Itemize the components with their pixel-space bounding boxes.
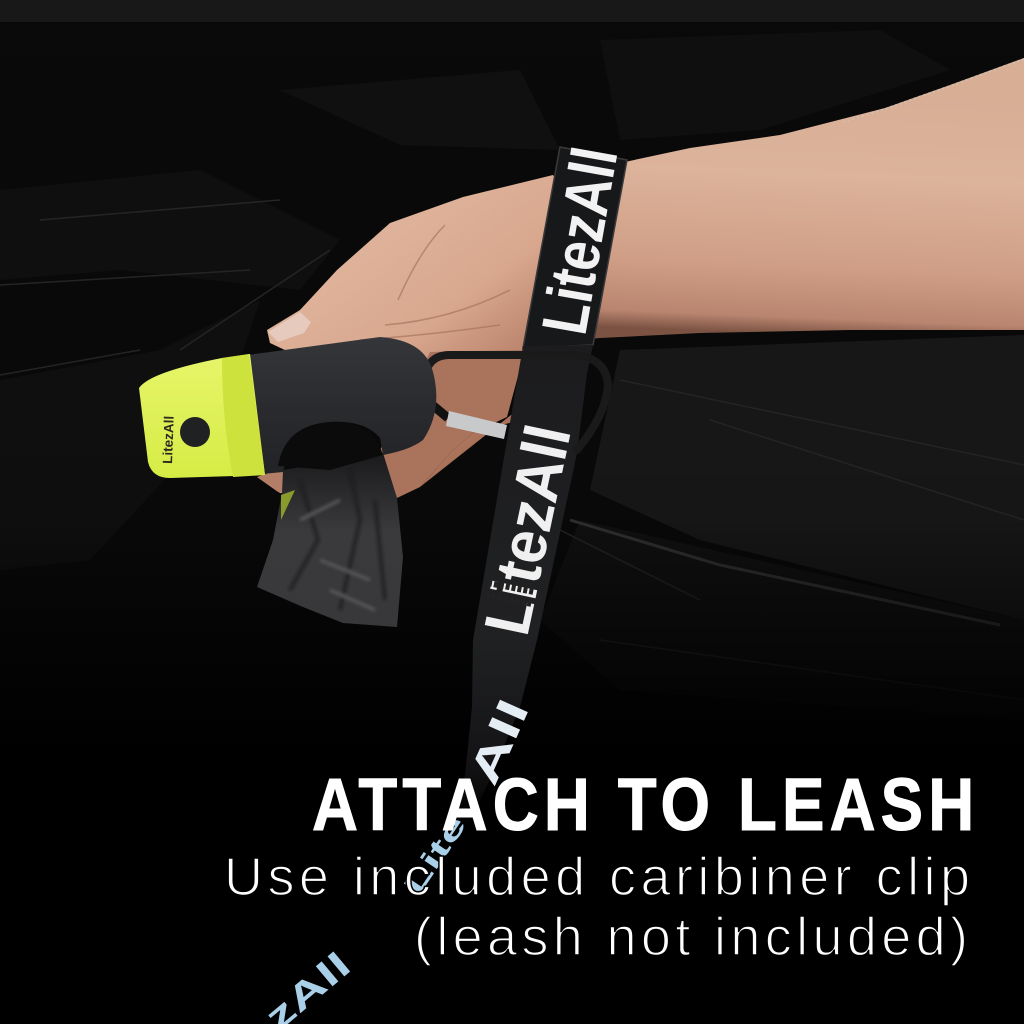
hand creases xyxy=(360,225,510,340)
thumb nail xyxy=(268,312,311,342)
power button xyxy=(180,417,210,447)
strap logo: LitezAll xyxy=(470,419,585,641)
title: ATTACH TO LEASH xyxy=(312,764,974,846)
lower leash strap xyxy=(257,345,593,1024)
poop bag xyxy=(257,453,403,627)
dark body xyxy=(248,337,436,474)
subtitle line 1: Use included caribiner clip xyxy=(224,847,970,907)
reflective band xyxy=(222,354,265,477)
subtitle line 2: (leash not included) xyxy=(414,907,968,967)
arm hair edge xyxy=(840,59,1024,123)
arm and wrist xyxy=(545,58,1024,342)
strap stitching xyxy=(486,583,534,604)
hand xyxy=(257,175,570,498)
strap logo twist: All xyxy=(459,692,538,792)
yellow head xyxy=(139,354,265,478)
dispenser xyxy=(139,337,436,478)
faded strap logo: Lite xyxy=(397,810,472,900)
bag reflection xyxy=(281,490,295,520)
carabiner clip xyxy=(429,355,608,450)
upper leash strap xyxy=(523,142,631,348)
device logo: LitezAll xyxy=(160,416,177,464)
bag opening xyxy=(278,422,383,470)
strap logo: LitezAll xyxy=(528,142,631,339)
fingers under device xyxy=(257,468,290,493)
lower palm xyxy=(380,350,525,498)
bag folds xyxy=(290,470,385,610)
